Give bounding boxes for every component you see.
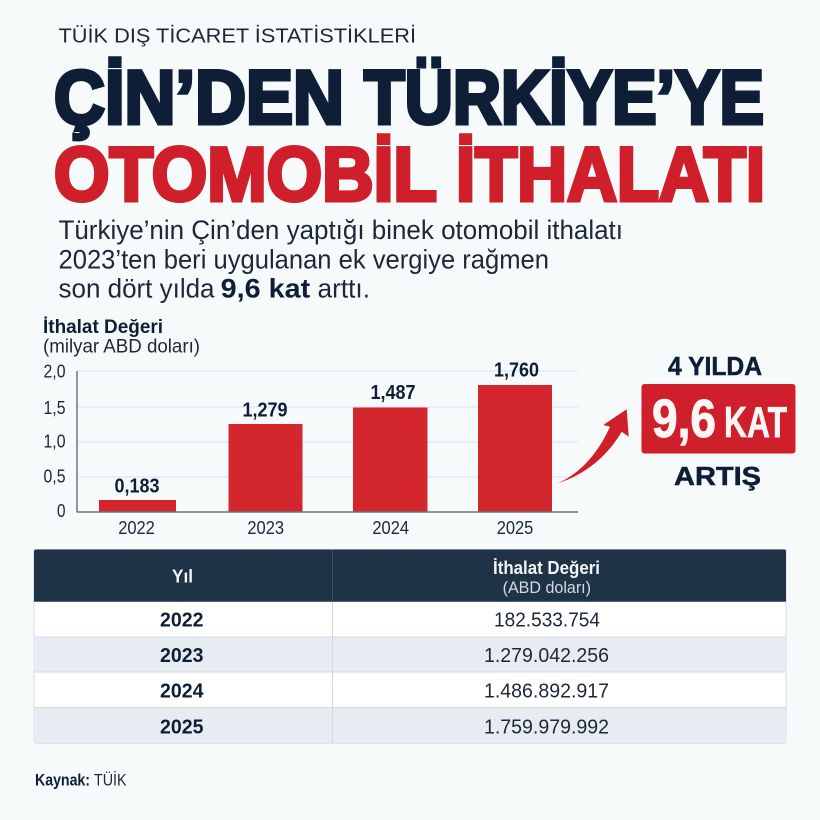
source note: TÜİK [94,770,126,790]
table values [484,610,609,738]
bar chart [44,360,578,538]
callout number: 9,6 [652,389,716,449]
table header: Yıl [172,567,193,587]
bar value labels: 1,487 [370,382,416,404]
x axis labels [118,518,533,538]
table values: 1.486.892.917 [484,681,609,703]
y axis labels: 0 [57,501,66,521]
source note: Kaynak: [35,772,90,790]
x axis labels: 2025 [497,518,533,538]
bars [99,385,552,512]
intro text: 9,6 kat [221,274,310,304]
intro text: 2023’ten beri uygulanan ek vergiye rağmen [58,244,549,274]
callout [642,351,796,491]
bar value labels [114,360,539,498]
title [54,56,765,218]
x axis labels: 2023 [247,518,284,538]
table values: 1.759.979.992 [484,716,609,738]
title line 2: OTOMOBİL [54,132,437,218]
table years: 2025 [160,716,204,738]
y axis labels [44,362,66,521]
title line 1: TÜRKİYE’YE [364,56,764,140]
x axis labels: 2022 [118,518,155,538]
data table [34,550,786,744]
y axis labels: 1,0 [44,432,66,452]
arrow [557,409,629,483]
table values: 182.533.754 [494,610,600,632]
table header: (ABD doları) [503,578,591,597]
kicker heading: TÜİK DIŞ TİCARET İSTATİSTİKLERİ [58,25,416,48]
intro text: arttı. [318,274,370,304]
intro text: son dört yılda [58,274,215,304]
callout bottom label: ARTIŞ [674,461,761,491]
table years: 2023 [160,645,204,667]
table header [34,550,786,602]
chart title: İthalat Değeri [43,317,163,338]
callout red box [642,384,796,454]
table years [160,610,204,738]
callout unit: KAT [724,398,787,447]
bar value labels: 0,183 [114,476,160,498]
title line 2: İTHALATI [456,132,765,218]
source note [35,770,126,790]
y axis labels: 1,5 [44,398,66,418]
callout top label: 4 YILDA [668,351,762,381]
x axis labels: 2024 [372,518,409,538]
chart title: (milyar ABD doları) [43,337,200,358]
y axis labels: 0,5 [44,467,66,487]
intro text: Türkiye’nin Çin’den yaptığı binek otomobil ithalatı [58,215,623,245]
bar value labels: 1,760 [494,360,539,382]
intro text [58,215,623,304]
chart title [43,317,200,358]
table years: 2024 [160,681,204,703]
table header: İthalat Değeri [493,558,600,578]
bar value labels: 1,279 [242,400,288,422]
title line 2 [54,132,765,218]
table values: 1.279.042.256 [484,645,609,667]
title line 1 [54,56,764,140]
title line 1: ÇİN’DEN [54,56,344,140]
y axis labels: 2,0 [44,362,66,382]
table years: 2022 [160,610,204,632]
